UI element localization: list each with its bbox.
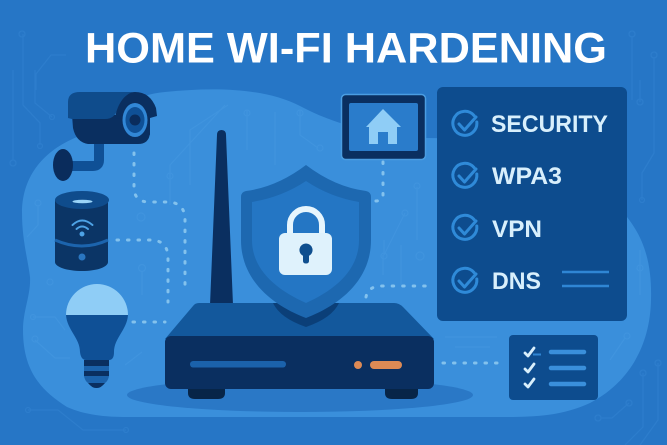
camera body	[72, 115, 150, 144]
camera wall mount	[53, 144, 99, 181]
padlock body	[279, 233, 332, 275]
keyhole	[299, 243, 313, 264]
router shadow	[127, 378, 473, 412]
monitor screen	[349, 103, 418, 151]
speaker body	[55, 200, 108, 271]
router slot	[190, 361, 286, 368]
panel: security checklist	[437, 87, 627, 321]
decorative text lines	[562, 272, 609, 286]
title: HOME WI-FI HARDENING	[85, 24, 607, 72]
item: dns: DNS	[492, 268, 541, 295]
item: wpa3	[453, 163, 562, 190]
camera housing top	[68, 92, 133, 119]
bulb base	[84, 360, 109, 388]
wifi symbol	[72, 220, 92, 236]
bulb lower body	[66, 315, 128, 360]
smart home monitor	[342, 94, 426, 160]
shield inner	[252, 181, 359, 303]
icon: security camera	[53, 92, 157, 181]
shield outer	[241, 165, 371, 318]
router status bar	[370, 361, 402, 369]
router front	[165, 336, 434, 389]
dotted connector lines	[117, 153, 500, 363]
padlock	[279, 209, 332, 275]
short line	[533, 354, 541, 356]
camera front hood	[115, 92, 157, 135]
padlock shackle	[290, 209, 322, 235]
checklist card	[509, 335, 598, 400]
bulb glass	[66, 284, 128, 315]
blob circuit traces	[27, 105, 643, 365]
background blob	[22, 89, 651, 417]
icon: light bulb	[66, 284, 128, 388]
item: vpn: VPN	[492, 216, 542, 243]
router top	[165, 303, 434, 339]
icon: smart speaker	[55, 191, 109, 271]
speaker top	[55, 191, 109, 209]
router antenna	[210, 130, 233, 305]
item: security: SECURITY	[491, 111, 608, 138]
router feet	[188, 388, 418, 399]
router	[165, 303, 434, 399]
shield with padlock	[241, 165, 371, 327]
monitor frame	[342, 94, 426, 160]
item: wpa3: WPA3	[492, 163, 562, 190]
item: dns	[453, 268, 541, 295]
camera lens	[122, 103, 148, 137]
speaker band	[55, 240, 108, 246]
speaker button	[78, 254, 86, 260]
speaker light strip	[72, 200, 92, 203]
check marks	[525, 348, 534, 387]
shield shadow	[273, 303, 339, 327]
router status light	[354, 361, 362, 369]
icon: house	[366, 109, 401, 144]
checklist lines	[551, 352, 584, 384]
item: vpn	[453, 215, 542, 243]
